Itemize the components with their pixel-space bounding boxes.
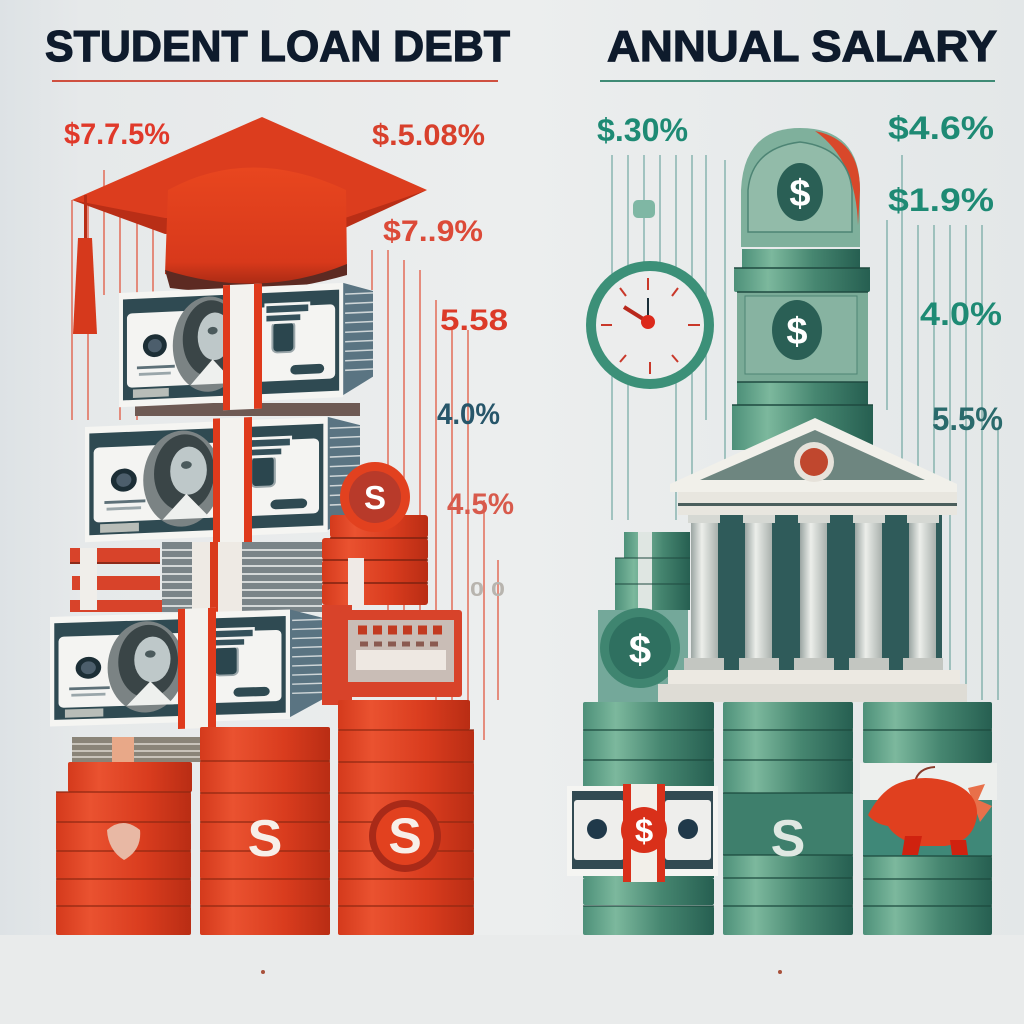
percent labels: salary: 4.0% [920,296,1002,332]
columns [684,515,943,670]
green tower stack [732,249,873,450]
red stack column 1 [56,762,192,935]
icon: piggy bank [868,767,992,855]
green coin [600,608,680,688]
title: student loan debt: STUDENT LOAN DEBT [45,22,510,71]
percent labels: debt: 4.5% [447,488,514,521]
divider red [52,80,498,82]
bundle of cash 2 [85,412,360,549]
percent labels: salary: 5.5% [932,401,1003,437]
green tower stack: $ [786,311,808,353]
small bills stack [72,737,200,762]
percent labels: salary: $1.9% [888,182,994,218]
paper band [178,608,216,729]
middle bundles [70,542,322,612]
letter S: S [771,810,805,868]
coin badge: S [388,808,422,864]
floor specks [261,970,782,974]
bundle of cash 1 [119,278,373,415]
bundle of cash 3 [50,604,322,733]
floor [0,935,1024,1024]
small green stack [598,532,690,702]
green coin: $ [629,628,651,672]
percent labels: debt: $7.7.5% [64,118,170,151]
percent labels: salary: $4.6% [888,110,994,146]
cash bill: $ [635,812,653,849]
vertical rules: debt [72,170,498,760]
percent labels: salary: $.30% [597,112,688,148]
percent labels: salary [597,110,1003,437]
bank building [658,418,967,702]
red stack column 3 [338,700,474,935]
green stack column 1 [583,702,714,935]
icon: graduation cap [72,117,427,334]
green stack column 3 [860,702,997,935]
paper band [213,417,252,544]
percent labels: debt: $7..9% [383,215,483,248]
percent labels: debt: 0 0 [470,579,505,601]
card: building [340,610,462,697]
letter S: S [248,810,282,868]
green top coin: $ [789,173,811,215]
title: annual salary: ANNUAL SALARY [607,22,997,71]
percent labels: debt [64,118,514,601]
coin badge [369,800,441,872]
shelf [135,403,360,416]
paper band [223,284,262,410]
green top coin [741,128,860,247]
cash bill [567,784,718,882]
divider green [600,80,995,82]
percent labels: debt: 5.58 [440,304,508,337]
percent labels: debt: 4.0% [437,398,500,431]
vertical rules: salary [612,155,998,700]
icon: clock [586,261,714,389]
red stack column 2 [200,727,330,935]
red coin stack upper [322,515,428,705]
coin with dollar [340,462,410,532]
coin with dollar: S [364,479,386,516]
small green tag [633,200,655,218]
percent labels: debt: $.5.08% [372,119,485,152]
green stack column 2 [723,702,853,935]
